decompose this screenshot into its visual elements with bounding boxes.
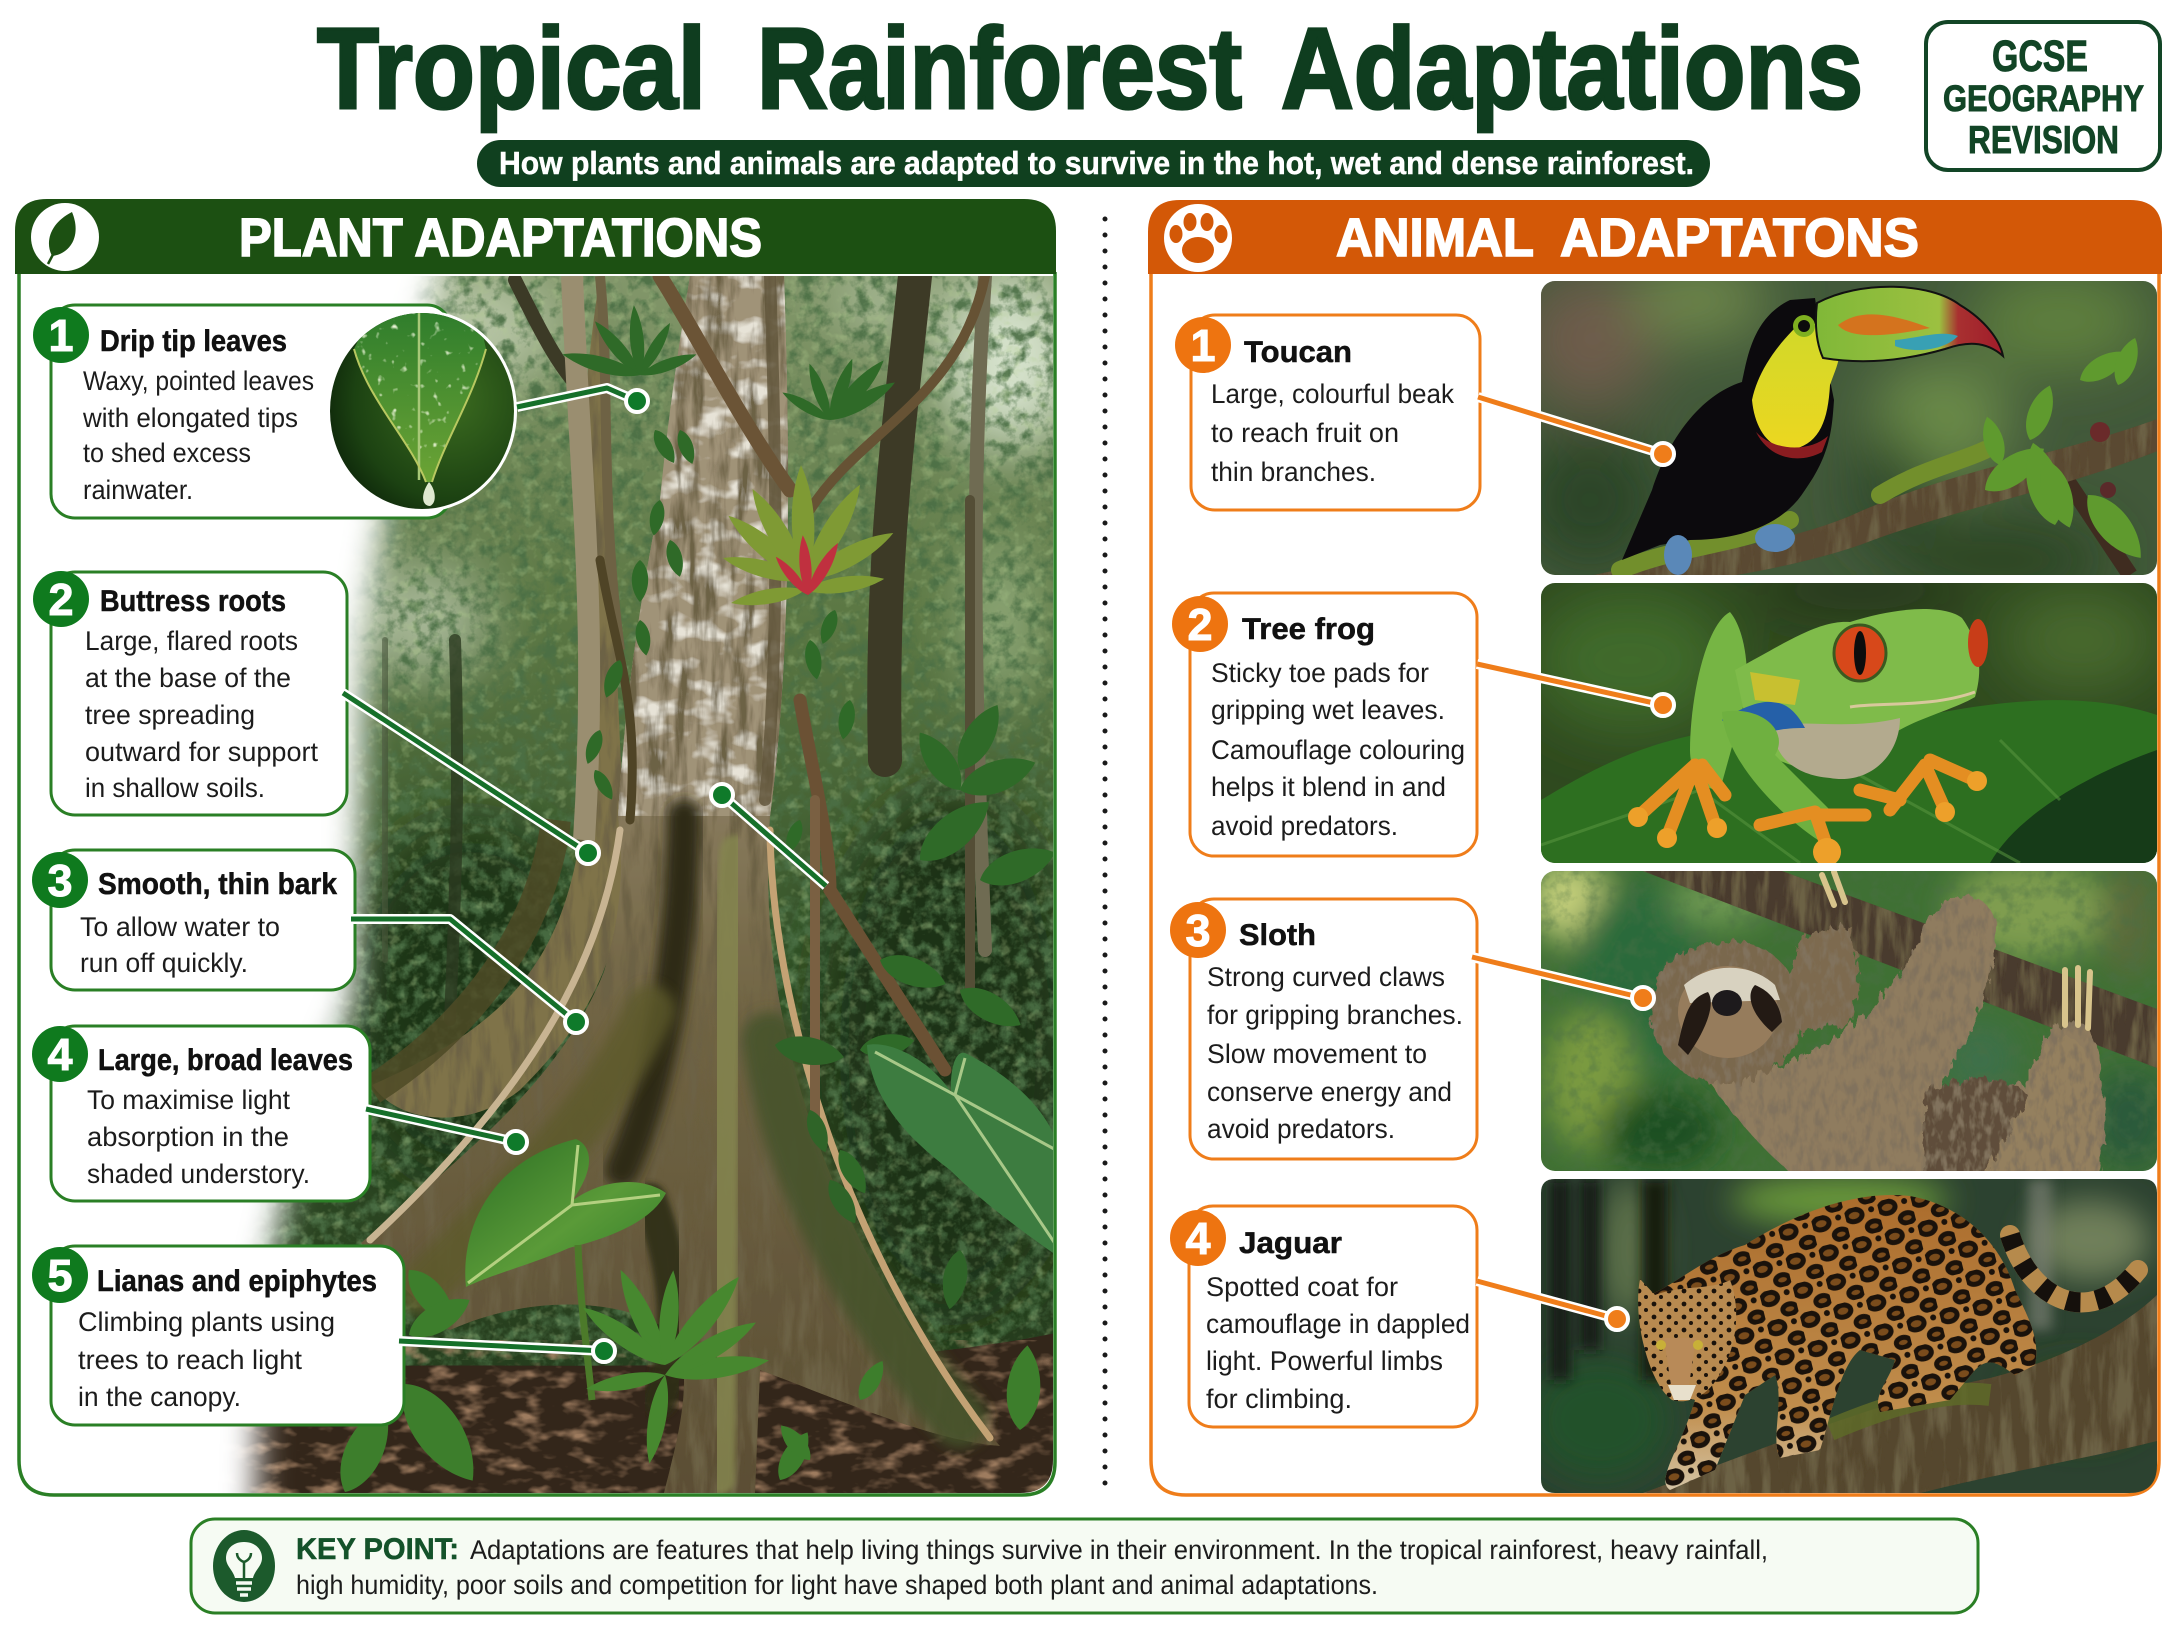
large understory leaves	[328, 1032, 1056, 1500]
callout 2: buttress roots: 2	[48, 574, 74, 625]
callout 3: sloth: Slow movement to	[1207, 1039, 1427, 1069]
callout 4: large, broad leaves	[32, 1026, 370, 1201]
callout 1: toucan	[1175, 315, 1480, 510]
panel header: plants: PLANT ADAPTATIONS	[239, 208, 762, 268]
trunk crevices and moss	[370, 276, 990, 1480]
callout 5: lianas and epiphytes: 5	[47, 1250, 73, 1301]
callout 3: smooth, thin bark: To allow water to	[80, 912, 280, 942]
callout 4: large, broad leaves: 4	[47, 1029, 73, 1080]
callout 2: tree frog: 2	[1187, 599, 1213, 650]
panel: plant adaptations	[15, 199, 1080, 1510]
callout 1: toucan: to reach fruit on	[1211, 418, 1399, 448]
callout 3: sloth: avoid predators.	[1207, 1114, 1395, 1144]
callout 4: large, broad leaves: To maximise light	[87, 1085, 290, 1115]
callout 4: large, broad leaves: Large, broad leaves	[98, 1044, 353, 1077]
panel outline: animals	[1151, 272, 2159, 1495]
toucan body	[1622, 298, 1834, 560]
divider	[1102, 219, 1108, 1490]
badge: GCSE Geography Revision: REVISION	[1968, 119, 2119, 162]
callout 4: jaguar: Spotted coat for	[1206, 1272, 1398, 1302]
callout 2: tree frog: Tree frog	[1242, 613, 1375, 646]
callout 1: toucan: 1	[1190, 320, 1216, 371]
callout 3: sloth: Strong curved claws	[1207, 962, 1445, 992]
callout 4: jaguar: for climbing.	[1206, 1384, 1352, 1414]
icon: paw print	[1164, 204, 1232, 272]
leader lines: plants	[343, 388, 826, 1362]
callout 4: large, broad leaves: shaded understory.	[87, 1159, 310, 1189]
callout 3: smooth, thin bark: Smooth, thin bark	[98, 868, 337, 901]
badge: GCSE Geography Revision: GCSE	[1992, 32, 2088, 81]
callout 3: smooth, thin bark: 3	[47, 855, 73, 906]
wet leaf	[1541, 700, 2157, 863]
background trunks	[385, 276, 985, 1020]
icon: leaf	[31, 203, 99, 271]
callout 4: jaguar: camouflage in dappled	[1206, 1309, 1470, 1339]
callout 1: drip tip leaves: to shed excess	[83, 438, 251, 468]
jaguar tail	[2010, 1235, 2138, 1302]
callout 2: buttress roots: outward for support	[85, 737, 318, 767]
callout 4: jaguar: light. Powerful limbs	[1206, 1346, 1443, 1376]
main trunk with buttress roots	[361, 276, 1000, 1493]
panel outline: plants	[19, 272, 1055, 1495]
callout 2: buttress roots: Large, flared roots	[85, 626, 298, 656]
callout 3: smooth, thin bark	[32, 850, 355, 990]
callout 3: sloth: 3	[1185, 905, 1211, 956]
key point box	[191, 1519, 1978, 1613]
callout 4: jaguar	[1170, 1206, 1477, 1427]
callout 3: sloth: Sloth	[1239, 919, 1316, 952]
callout 5: lianas and epiphytes: Lianas and epiphytes	[97, 1265, 377, 1298]
callout 2: buttress roots: tree spreading	[85, 700, 255, 730]
callout 2: buttress roots: Buttress roots	[100, 585, 286, 618]
callout 1: toucan: thin branches.	[1211, 457, 1376, 487]
pale upper trunk bark	[618, 276, 788, 816]
badge: GCSE Geography Revision	[1926, 22, 2160, 170]
callout 3: sloth: conserve energy and	[1207, 1077, 1452, 1107]
panel header: plants	[15, 199, 1056, 274]
callout 2: tree frog: Sticky toe pads for	[1211, 658, 1429, 688]
jaguar head	[1638, 1279, 1736, 1401]
panel header: animals: ADAPTATONS	[1560, 208, 1919, 268]
callout 5: lianas and epiphytes: trees to reach light	[78, 1345, 302, 1375]
title: Tropical	[317, 5, 706, 133]
callout 2: tree frog	[1172, 593, 1477, 856]
title: Rainforest	[757, 5, 1242, 133]
callout 3: smooth, thin bark: run off quickly.	[80, 948, 248, 978]
callout 2: buttress roots: in shallow soils.	[85, 773, 265, 803]
subtitle banner: How plants and animals are adapted to survive in the hot, wet and dense rainforest.	[499, 145, 1694, 181]
photo: tree frog	[1530, 565, 2160, 866]
callout 1: drip tip leaves: Drip tip leaves	[100, 325, 287, 358]
key point box: high humidity, poor soils and competition for light have shaped both plant and animal adaptations.	[296, 1570, 1378, 1600]
callout 1: drip tip leaves: 1	[48, 310, 74, 361]
bromeliad	[721, 465, 898, 610]
callout 3: sloth	[1170, 899, 1477, 1159]
toucan beak	[1816, 287, 2003, 361]
callout 2: tree frog: avoid predators.	[1211, 811, 1398, 841]
callout 2: buttress roots	[33, 571, 347, 815]
panel header: animals: ANIMAL	[1336, 208, 1534, 268]
tree limb	[1643, 1295, 2157, 1493]
jaguar body	[1640, 1195, 2036, 1490]
photo: sloth	[1530, 860, 2170, 1180]
frog	[1690, 612, 1747, 790]
callout 1: toucan: Toucan	[1244, 336, 1352, 369]
callout 1: drip tip leaves: Waxy, pointed leaves	[83, 366, 314, 396]
callout 2: tree frog: gripping wet leaves.	[1211, 695, 1445, 725]
sloth face	[1650, 940, 1802, 1084]
photo: toucan	[1541, 281, 2157, 575]
icon: leaf close-up with water drop	[330, 312, 517, 510]
ground leaf litter	[240, 1334, 1053, 1493]
callout 4: jaguar: 4	[1185, 1213, 1211, 1264]
branch	[1643, 871, 2157, 1068]
callout 1: drip tip leaves	[33, 305, 451, 518]
callout 3: sloth: for gripping branches.	[1207, 1000, 1463, 1030]
callout 5: lianas and epiphytes: in the canopy.	[78, 1382, 241, 1412]
key point box: KEY POINT:	[296, 1533, 459, 1566]
sloth body and limbs	[1792, 925, 1858, 1030]
callout 2: tree frog: Camouflage colouring	[1211, 735, 1465, 765]
callout 1: drip tip leaves: rainwater.	[83, 475, 193, 505]
key point box: Adaptations are features that help living things survive in their environment. In the tropical rainforest, heavy rainfall,	[470, 1535, 1768, 1565]
panel: animal adaptations	[1148, 200, 2170, 1495]
callout 4: jaguar: Jaguar	[1239, 1227, 1342, 1260]
callout 2: tree frog: helps it blend in and	[1211, 772, 1446, 802]
callout 1: toucan: Large, colourful beak	[1211, 379, 1454, 409]
photo: jaguar	[1530, 1176, 2157, 1493]
panel header: animals	[1148, 200, 2162, 274]
rear buttress roots and lianas	[372, 276, 625, 1118]
leader lines: animals	[1472, 397, 1674, 1330]
vines on trunk	[561, 305, 1061, 1198]
title: Adaptations	[1281, 5, 1863, 133]
callout 5: lianas and epiphytes	[32, 1246, 404, 1425]
callout 4: large, broad leaves: absorption in the	[87, 1122, 289, 1152]
callout 2: buttress roots: at the base of the	[85, 663, 291, 693]
callout 1: drip tip leaves: with elongated tips	[82, 403, 298, 433]
callout 5: lianas and epiphytes: Climbing plants using	[78, 1307, 335, 1337]
title	[317, 5, 1863, 133]
frog toes	[1640, 760, 1975, 850]
forest photo: buttress-root tree	[200, 260, 1080, 1510]
icon: light bulb	[213, 1530, 275, 1602]
